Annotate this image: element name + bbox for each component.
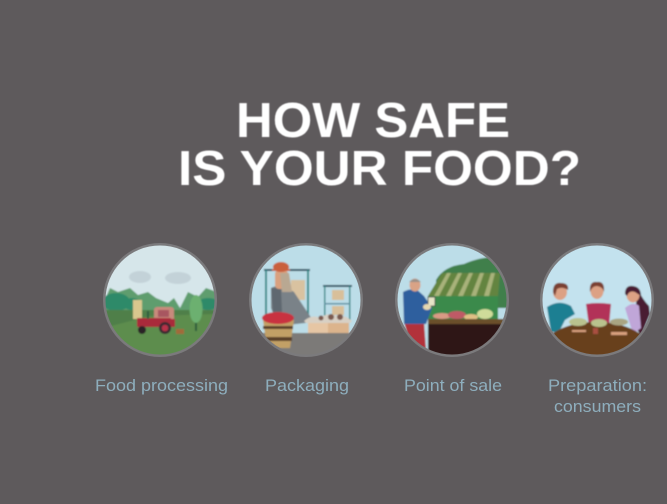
infographic canvas xyxy=(96,102,654,412)
person left xyxy=(547,283,575,332)
label: preparation consumers: consumers xyxy=(554,397,641,416)
title xyxy=(178,94,581,196)
label: preparation consumers xyxy=(548,376,647,416)
tree xyxy=(190,295,202,331)
title: HOW SAFE xyxy=(236,94,510,148)
title: IS YOUR FOOD? xyxy=(178,142,581,196)
icon: packaging scene xyxy=(249,243,363,363)
person middle xyxy=(586,282,611,326)
label: preparation consumers: Preparation: xyxy=(548,376,647,395)
person right xyxy=(625,286,650,336)
label: packaging: Packaging xyxy=(265,376,349,395)
food on display xyxy=(433,309,493,320)
icon: food processing farm scene xyxy=(102,243,219,360)
worker xyxy=(271,262,314,326)
table xyxy=(553,321,640,354)
shelf xyxy=(323,285,352,320)
label: point of sale: Point of sale xyxy=(404,376,502,395)
vendor xyxy=(403,278,435,350)
sign post xyxy=(133,300,142,319)
label: food processing: Food processing xyxy=(95,376,228,395)
icon: consumers at table xyxy=(540,243,654,357)
apple barrel xyxy=(262,312,294,348)
tractor xyxy=(137,307,184,334)
produce crates xyxy=(304,314,352,333)
icon: point of sale market stall xyxy=(395,243,512,358)
dishes xyxy=(569,318,628,335)
striped awning xyxy=(428,273,500,296)
